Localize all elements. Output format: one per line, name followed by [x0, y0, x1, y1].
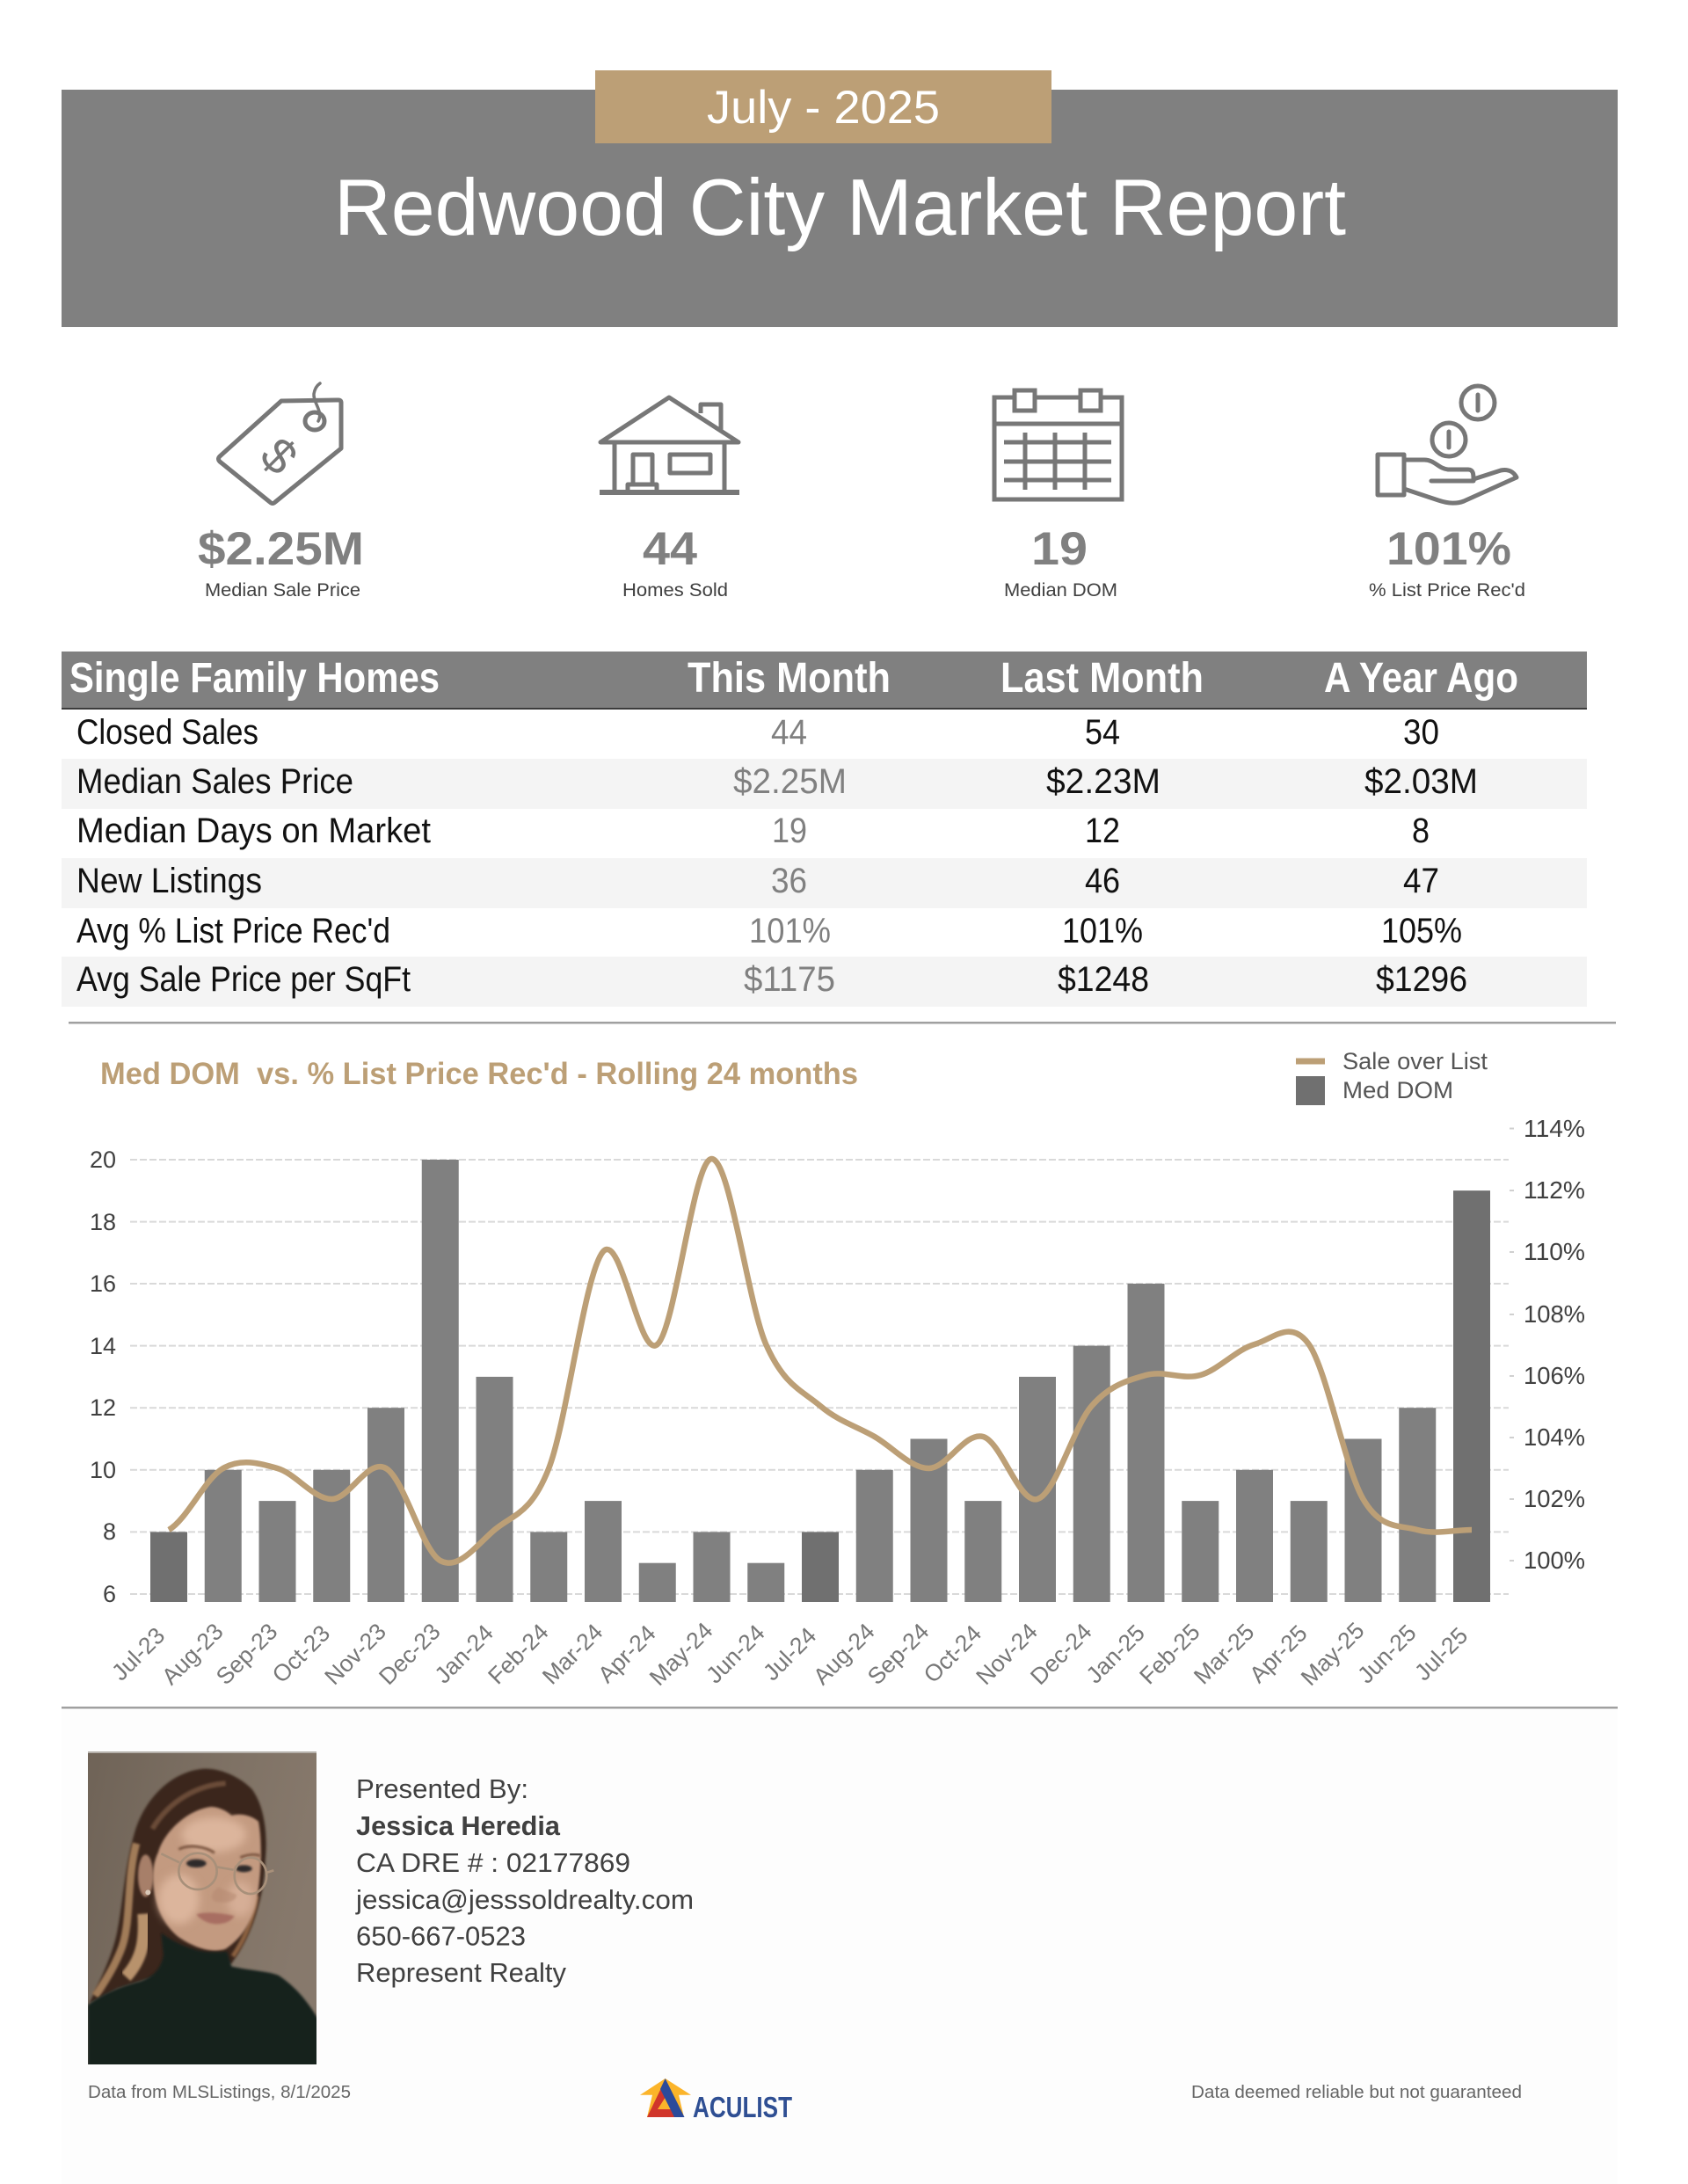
month axis labels: Jul-23: [106, 1622, 170, 1685]
row: closed sales: [76, 713, 1439, 752]
agent contact details: Represent Realty: [356, 1957, 566, 1988]
KPI: median DOM: Median DOM: [1004, 579, 1117, 601]
month axis labels: Jun-24: [701, 1620, 770, 1688]
legend: Med DOM: [1342, 1077, 1453, 1103]
row: median days on market: Median Days on Market: [76, 812, 431, 850]
row: median sales price: [62, 759, 1587, 809]
agent contact details: Presented By:: [356, 1773, 528, 1804]
icon: calendar: [994, 390, 1122, 499]
hair: [90, 1769, 266, 2003]
left axis labels: 12: [90, 1394, 116, 1421]
row: average sale price per square foot: $1296: [1376, 960, 1467, 999]
logo: aculist: ACULIST: [693, 2091, 792, 2123]
KPI: homes sold: Homes Sold: [622, 579, 728, 601]
row: median sales price: Median Sales Price: [76, 762, 353, 801]
month axis labels: Aug-23: [156, 1618, 229, 1690]
chart: med DOM vs list price received: [90, 1048, 1585, 1691]
table header row: [62, 652, 1587, 710]
ear: [138, 1854, 153, 1896]
agent contact details: 650-667-0523: [356, 1920, 526, 1952]
table header row: This Month: [688, 655, 891, 702]
agent contact details: jessica@jesssoldrealty.com: [355, 1884, 694, 1915]
KPI: median sale price: Median Sale Price: [205, 579, 360, 601]
nose and lips: [213, 1889, 236, 1903]
month axis labels: Apr-25: [1244, 1620, 1313, 1688]
icon: price tag: $: [250, 426, 309, 485]
KPI: median DOM: 19: [1031, 523, 1088, 575]
logo: aculist: [640, 2078, 792, 2123]
left axis labels: [90, 1147, 116, 1607]
agent contact details: [355, 1773, 694, 1988]
legend: Sale over List: [1342, 1048, 1488, 1074]
month axis labels: Nov-24: [971, 1618, 1043, 1690]
row: median sales price: $2.23M: [1046, 762, 1160, 801]
row: average list price received: 101%: [1062, 912, 1143, 950]
KPI: list price received: % List Price Rec'd: [1369, 579, 1525, 601]
bars: median days on market: [150, 1160, 1490, 1602]
month axis labels: Aug-24: [808, 1618, 880, 1690]
row: average list price received: 101%: [749, 912, 831, 950]
month axis labels: Apr-24: [593, 1620, 661, 1688]
month axis labels: Sep-23: [211, 1618, 282, 1690]
month axis labels: Mar-24: [537, 1619, 608, 1689]
month axis labels: Jan-25: [1080, 1620, 1150, 1688]
right axis labels: 114%: [1524, 1115, 1585, 1142]
KPI: homes sold: 44: [643, 523, 698, 575]
row: average sale price per square foot: Avg Sale Price per SqFt: [76, 960, 411, 999]
right axis labels: 112%: [1524, 1176, 1585, 1204]
icon: hand with coins: [1378, 386, 1517, 503]
data source note: Data from MLSListings, 8/1/2025: [88, 2083, 351, 2102]
month axis labels: Jun-25: [1352, 1620, 1422, 1688]
left axis labels: 20: [90, 1147, 116, 1173]
date tab: July - 2025: [707, 82, 940, 134]
table header row: A Year Ago: [1324, 655, 1518, 702]
right axis labels: 106%: [1524, 1362, 1585, 1389]
left axis labels: 16: [90, 1270, 116, 1297]
turtleneck: [88, 1933, 318, 2066]
icon: price tag: [218, 383, 341, 503]
legend: [1296, 1048, 1488, 1105]
table header row: Last Month: [1000, 655, 1204, 702]
row: closed sales: Closed Sales: [76, 713, 258, 752]
month axis labels: May-24: [644, 1617, 717, 1691]
row: new listings: 36: [771, 862, 807, 900]
month axis labels: Jul-24: [758, 1622, 821, 1685]
row: closed sales: 30: [1403, 713, 1439, 752]
right axis labels: 104%: [1524, 1423, 1585, 1451]
month axis labels: Sep-24: [862, 1618, 934, 1690]
row: average list price received: 105%: [1381, 912, 1462, 950]
left axis labels: 10: [90, 1457, 116, 1483]
KPI: median DOM: [994, 390, 1122, 601]
month axis labels: [106, 1617, 1473, 1691]
KPI: median sale price: $2.25M: [198, 523, 364, 575]
icon: house: [600, 397, 739, 492]
right axis labels: 108%: [1524, 1300, 1585, 1328]
left axis labels: 14: [90, 1333, 116, 1359]
left axis labels: 8: [103, 1518, 116, 1545]
right axis labels: [1524, 1115, 1585, 1574]
date tab: [595, 70, 1051, 143]
table: single family homes: [62, 652, 1587, 1007]
month axis labels: Jan-24: [429, 1620, 498, 1688]
row: median days on market: 12: [1085, 812, 1120, 850]
left axis labels: 6: [103, 1581, 116, 1607]
month axis labels: Dec-23: [374, 1618, 446, 1690]
right axis labels: 110%: [1524, 1238, 1585, 1265]
month axis labels: Dec-24: [1025, 1618, 1097, 1690]
month axis labels: May-25: [1296, 1617, 1369, 1691]
disclaimer: Data deemed reliable but not guaranteed: [1191, 2083, 1522, 2102]
KPI: list price received: 101%: [1386, 523, 1511, 575]
row: median days on market: 8: [1412, 812, 1430, 850]
row: average sale price per square foot: [62, 957, 1587, 1007]
line: sale over list: [169, 1159, 1472, 1563]
row: average sale price per square foot: $1175: [744, 960, 835, 999]
month axis labels: Oct-23: [267, 1620, 335, 1688]
row: median sales price: $2.03M: [1364, 762, 1478, 801]
row: median days on market: [76, 812, 1430, 850]
month axis labels: Oct-24: [919, 1620, 986, 1688]
KPI: homes sold: [600, 397, 739, 601]
row: new listings: New Listings: [76, 862, 262, 900]
right axis labels: 102%: [1524, 1485, 1585, 1512]
title: Redwood City Market Report: [334, 164, 1346, 252]
row: median days on market: 19: [772, 812, 807, 850]
header banner: [62, 70, 1618, 327]
KPI: median sale price: [198, 383, 364, 601]
month axis labels: Nov-23: [319, 1618, 391, 1690]
month axis labels: Feb-24: [483, 1619, 554, 1689]
chart title: Med DOM vs. % List Price Rec'd - Rolling 24 months: [100, 1057, 858, 1091]
row: new listings: 46: [1085, 862, 1120, 900]
right axis labels: 100%: [1524, 1547, 1585, 1574]
agent contact details: Jessica Heredia: [356, 1810, 561, 1841]
month axis labels: Jul-25: [1409, 1622, 1473, 1685]
left axis labels: 18: [90, 1209, 116, 1235]
KPI: list price received: [1369, 386, 1525, 601]
month axis labels: Mar-25: [1189, 1619, 1259, 1689]
glasses: [161, 1853, 273, 1894]
row: new listings: 47: [1403, 862, 1439, 900]
row: average sale price per square foot: $1248: [1058, 960, 1149, 999]
row: median sales price: $2.25M: [733, 762, 847, 801]
row: closed sales: 44: [771, 713, 807, 752]
row: new listings: [62, 858, 1587, 908]
month axis labels: Feb-25: [1134, 1619, 1205, 1689]
table header row: Single Family Homes: [69, 655, 440, 702]
agent contact details: CA DRE # : 02177869: [356, 1847, 630, 1878]
agent portrait: [88, 1750, 318, 2066]
face: [153, 1807, 261, 1951]
row: closed sales: 54: [1085, 713, 1120, 752]
row: average list price received: Avg % List Price Rec'd: [76, 912, 390, 950]
row: average list price received: [76, 912, 1462, 950]
brows and eyes: [178, 1846, 260, 1858]
